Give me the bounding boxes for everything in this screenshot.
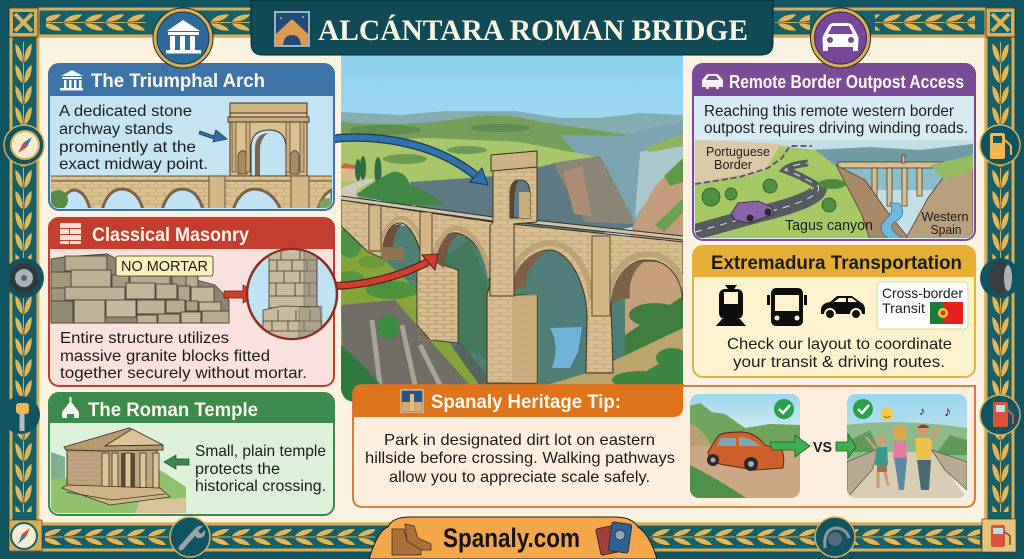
icon: check badge left [774,399,794,419]
panel: spanaly heritage tip [353,385,975,507]
body text [195,443,326,495]
illustration: triumphal arch on bridge [48,103,337,214]
icon: car [821,296,865,319]
illustration: family walking on bridge [847,394,967,498]
panel: classical masonry [49,218,337,386]
label: Tagus canyon: Tagus canyon [785,217,873,234]
corner ornament: top right [986,8,1015,37]
body text: together securely without mortar. [60,365,307,382]
body text: hillside before crossing. Walking pathways [365,450,675,467]
body text: Check our layout to coordinate [727,336,952,353]
arrow: small green [164,455,189,469]
callout: cross-border transit: Transit [882,300,925,316]
heading: Extremadura Transportation [711,253,962,274]
label: Portuguese Border: Portuguese [706,144,770,159]
heading: Classical Masonry [92,225,249,246]
illustration: route map [695,140,973,240]
body text [727,336,952,371]
icon: tire right [980,258,1020,298]
icon: car badge [810,8,870,68]
body text: Park in designated dirt lot on eastern [384,432,655,449]
icon: compass left [4,125,44,165]
central bridge illustration [336,55,688,402]
callout: no mortar: NO MORTAR [121,258,208,275]
icon: fuel pump right top [980,125,1020,165]
icon: gauge bottom [815,517,855,557]
illustration: temple [51,428,186,513]
icon: compass bottom left [9,520,42,551]
icon: bridge at night [275,12,309,46]
body text: exact midway point. [59,156,208,173]
body text: Small, plain temple [195,443,326,460]
arrow: green from vs [836,434,856,458]
icon: bricks [60,223,81,244]
icon: wrench bottom [170,517,210,557]
body text [704,103,968,137]
panel: extremadura transportation [693,246,975,377]
icon: fuel pump right red [980,395,1020,435]
icon: tire left [4,258,44,298]
panel: remote border outpost access [693,64,975,240]
heading: The Triumphal Arch [91,71,265,92]
label: Portuguese Border: Border [714,157,753,172]
icon: fuel pump bottom right [982,519,1016,552]
title banner [251,0,773,55]
label: Western Spain [922,209,968,237]
body text: historical crossing. [195,478,326,495]
arrow: red to bridge masonry [334,254,438,286]
icon: flag of Portugal [930,302,963,324]
icon: chapel [62,397,79,418]
body text [365,432,675,486]
icon: bus [767,288,807,326]
illustration: magnified pier [247,248,337,340]
icon: smiley and notes: ♪ [919,404,925,418]
body text: archway stands [59,121,173,138]
body text: allow you to appreciate scale safely. [389,469,650,486]
heading: ALCÁNTARA ROMAN BRIDGE [318,14,748,47]
body text: Reaching this remote western border [704,103,955,120]
body text: outpost requires driving winding roads. [704,120,968,137]
body text: your transit & driving routes. [733,354,945,371]
heading: Spanaly Heritage Tip: [431,392,621,413]
arrow: blue to midway arch [315,138,488,185]
illustration: masonry wall [51,254,229,323]
icon: smiley and notes: ♪ [944,403,951,419]
illustration: car on dirt lot [690,394,800,498]
icon: train [716,285,746,326]
icon: key left [2,396,40,434]
label: Western Spain: Spain [930,222,962,237]
panel: the triumphal arch [48,64,337,214]
body text: massive granite blocks fitted [60,348,270,365]
callout: cross-border transit [877,282,968,329]
panel: the roman temple [49,393,334,515]
icon: boots [392,524,431,555]
footer plaque: spanaly.com [369,517,657,559]
body text: protects the [195,461,280,478]
body text [60,330,307,382]
body text: A dedicated stone [59,103,192,120]
heading: The Roman Temple [88,400,258,421]
body text: Entire structure utilizes [60,330,229,347]
body text: prominently at the [59,139,196,156]
corner ornament: top left [9,8,38,37]
label: vs: VS [813,439,832,456]
icon: bridge tile [401,390,423,412]
label: Western Spain: Western [922,209,968,224]
icon: check badge right [853,399,873,419]
icon: car small [702,74,723,89]
icon: temple badge [153,8,213,68]
heading: Spanaly.com [443,523,580,553]
label: Portuguese Border [706,144,770,172]
arrow: green to vs [770,435,810,457]
icon: temple small [60,70,83,90]
icon: passports [595,522,632,556]
arrow: small blue [199,130,227,142]
heading: Remote Border Outpost Access [729,72,964,92]
arrow: red small [224,285,257,303]
icon: smiley and notes [880,403,951,420]
callout: cross-border transit: Cross-border [882,285,963,301]
body text [59,103,208,173]
